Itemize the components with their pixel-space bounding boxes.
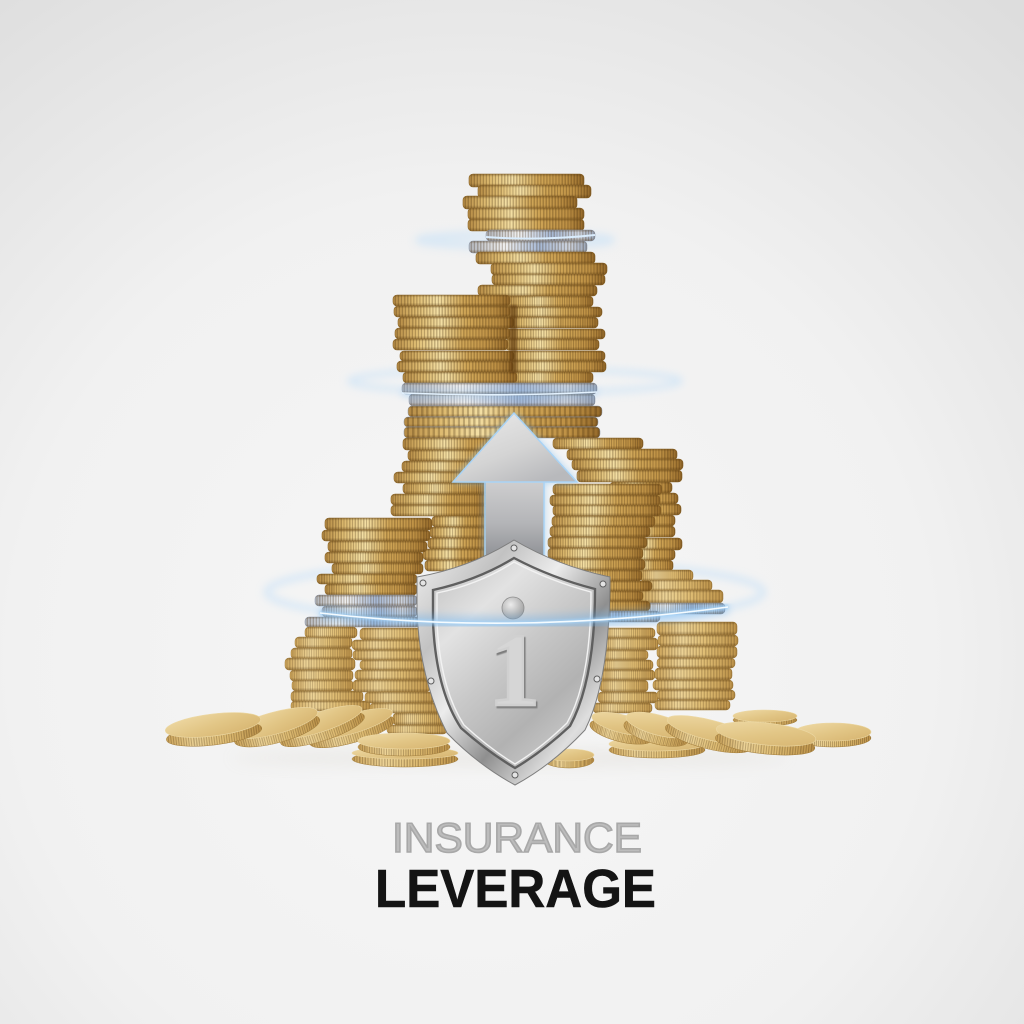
coin stack: bottom far right [653,622,738,710]
coin stack: silver band and central tower [391,383,602,571]
coin stack: left mid tower [305,518,432,627]
glowing ring front arc [320,607,728,623]
title line: insurance: INSURANCE [392,814,642,861]
coin stack: far right tower [553,438,725,614]
shield numeral: 1 [488,613,540,728]
flat coins: behind shield right [544,737,705,768]
title [375,814,656,919]
seam shadow between towers [510,305,517,373]
coin stack: bottom inner left [352,628,447,734]
upward arrow [453,413,577,560]
coin stack: top tower [463,174,607,383]
coin stack: bottom inner right [593,628,658,713]
back glow rings [267,234,763,622]
shield knob [502,597,524,619]
title line: leverage: LEVERAGE [375,859,656,919]
coin stack: bottom far left [285,627,370,711]
scattered coins: left [164,699,398,754]
scattered coins: right [588,707,871,759]
ring front arcs: upper [402,235,597,395]
coin stack: front right tower [547,484,662,622]
shield rivets [420,545,606,778]
flat coins: front left [352,733,458,767]
coin stack: upper left tower [393,295,517,383]
ground shadow [230,750,790,766]
shield [417,540,610,785]
